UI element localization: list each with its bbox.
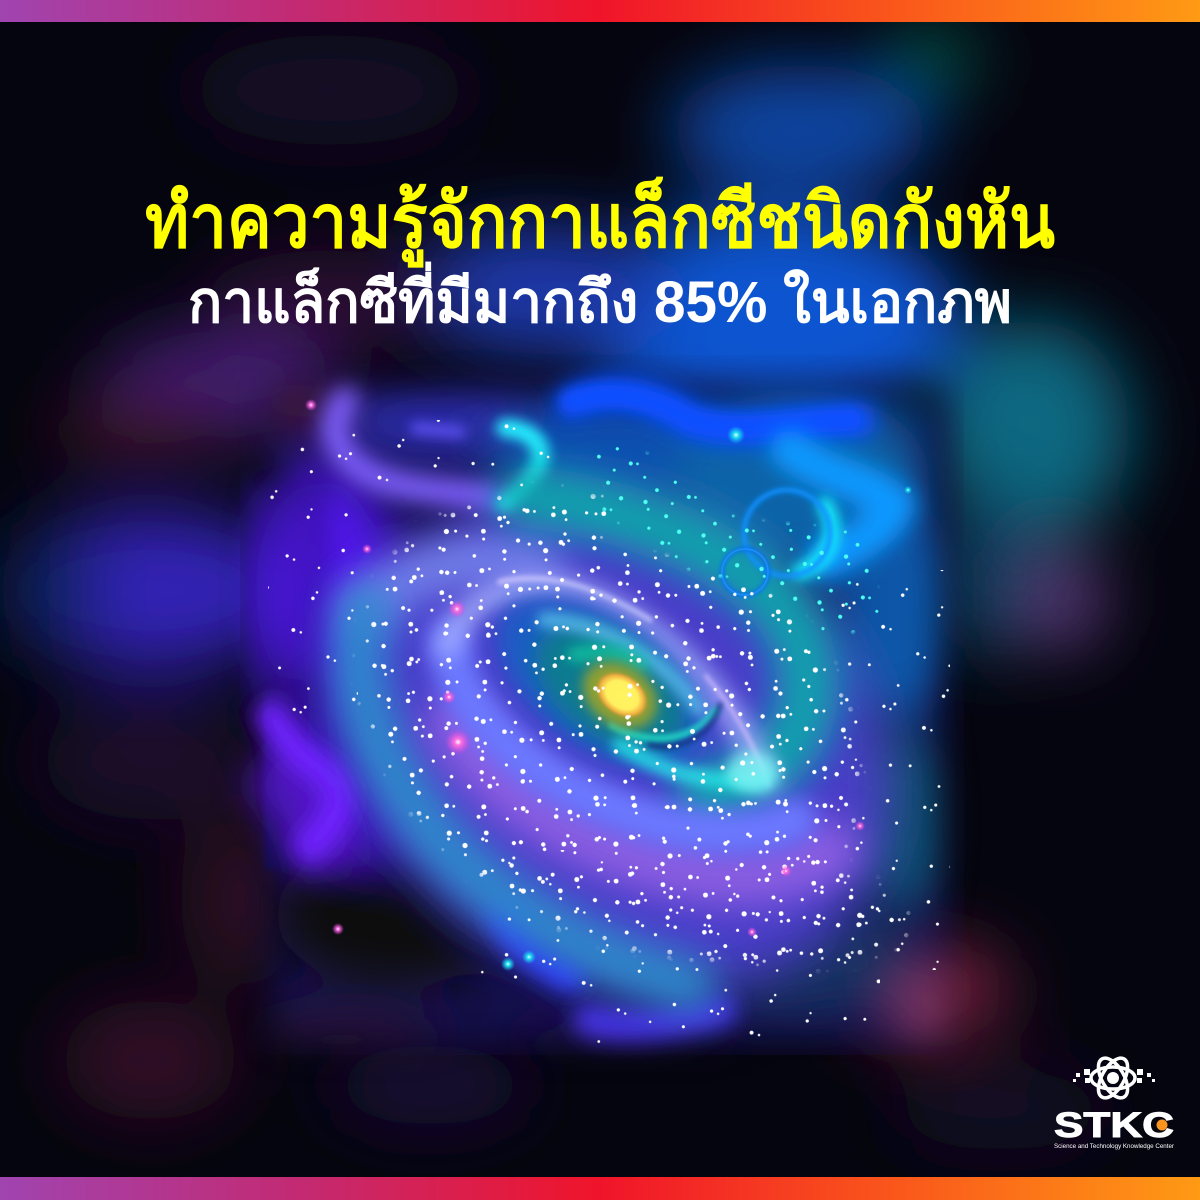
- wordmark: STKC: [1054, 1106, 1174, 1145]
- cyan glow bottom right of ring: [726, 752, 778, 792]
- galactic core: [570, 647, 670, 743]
- subtitle: กาแล็กซีที่มีมากถึง 85% ในเอกภพ: [188, 261, 1012, 335]
- lower purple band: [455, 725, 830, 876]
- icon: atom emblem: [1073, 1053, 1155, 1103]
- bottom gradient bar: [0, 1177, 1200, 1200]
- white star field: [260, 420, 960, 1050]
- nebula cloud: bottom blue: [505, 915, 720, 1024]
- inner dark teal lens: [467, 562, 733, 802]
- STKC logo: [1054, 1053, 1174, 1150]
- inner blue arm: [450, 640, 795, 832]
- nebula cloud: top-left violet wisp: [335, 400, 495, 498]
- upper lavender ribbon: [447, 586, 766, 780]
- galaxy backdrop panel: [240, 355, 985, 1087]
- title: ทำความรู้จักกาแล็กซีชนิดกังหัน: [145, 177, 1055, 268]
- nebula cloud: top blue band: [572, 393, 895, 560]
- cyan star field: [596, 446, 880, 634]
- icon: orange dot: [1156, 1120, 1168, 1130]
- lens rings: [722, 490, 832, 595]
- top gradient bar: [0, 0, 1200, 22]
- tagline: Science and Technology Knowledge Center: [1054, 1144, 1174, 1150]
- spiral arms: [358, 497, 830, 985]
- inner cyan swirls: [545, 620, 765, 781]
- nebula cloud: left violet wave: [262, 705, 339, 870]
- outer lavender-to-teal arm: [365, 560, 540, 610]
- upper right teal arm: [528, 497, 808, 795]
- cyan flare: [505, 428, 541, 503]
- glowing cyan stars: [501, 426, 912, 971]
- glowing pink stars: [305, 399, 865, 937]
- spiral galaxy illustration: [240, 355, 985, 1087]
